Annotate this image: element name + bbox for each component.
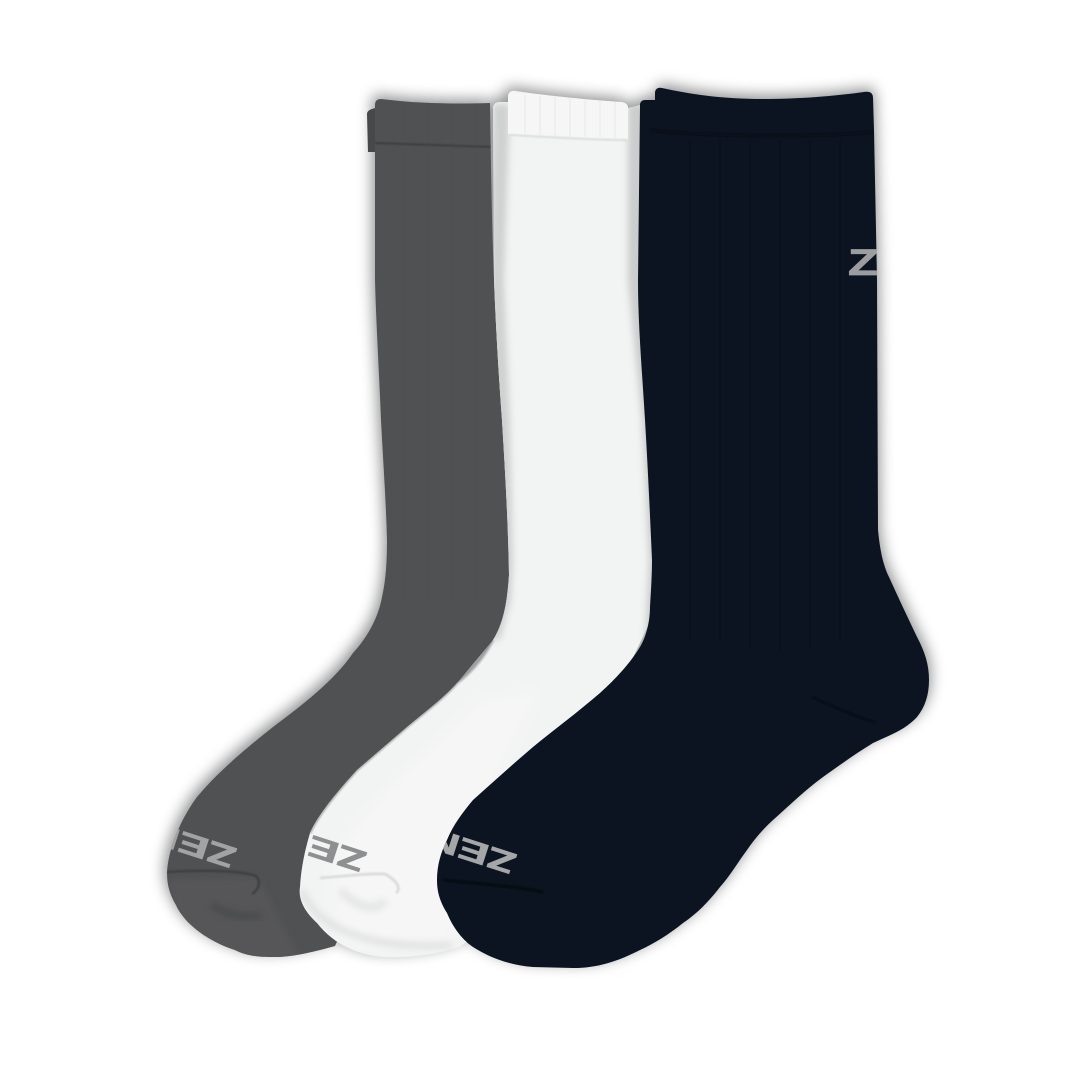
- black sock cuff line: [650, 130, 873, 136]
- white sock right shaded band: [625, 106, 652, 636]
- black toe seam: [443, 880, 543, 892]
- sock: white: [300, 90, 652, 957]
- white cuff: [508, 92, 628, 140]
- white sock body: [300, 90, 652, 957]
- logo: black leg: ZEN: [848, 242, 948, 283]
- grey sock cuff fold: [367, 108, 376, 152]
- white foot highlight: [336, 940, 337, 941]
- grey sock body: [167, 99, 509, 957]
- black sock body: [430, 80, 940, 980]
- white sock edge rim: [310, 640, 493, 833]
- sock: black: [422, 80, 948, 980]
- white sock ribs: [525, 95, 615, 139]
- black sock ribs: [690, 140, 840, 650]
- white sock cuff line: [509, 135, 628, 140]
- grey sock ribs: [392, 100, 440, 104]
- logo: white toe: ZEN: [272, 818, 370, 878]
- grey toe seam: [167, 871, 259, 894]
- sock: grey: [167, 99, 509, 957]
- product photo: three ZEN socks: [155, 76, 940, 974]
- soft drop shadows: [164, 84, 931, 964]
- grey sock cuff line: [375, 143, 493, 147]
- black heel seam: [812, 697, 875, 722]
- logo: black toe: ZEN: [422, 820, 520, 880]
- white toe seam: [320, 874, 398, 893]
- white sock left shaded band: [493, 102, 516, 642]
- logo: grey toe: ZEN: [142, 814, 240, 874]
